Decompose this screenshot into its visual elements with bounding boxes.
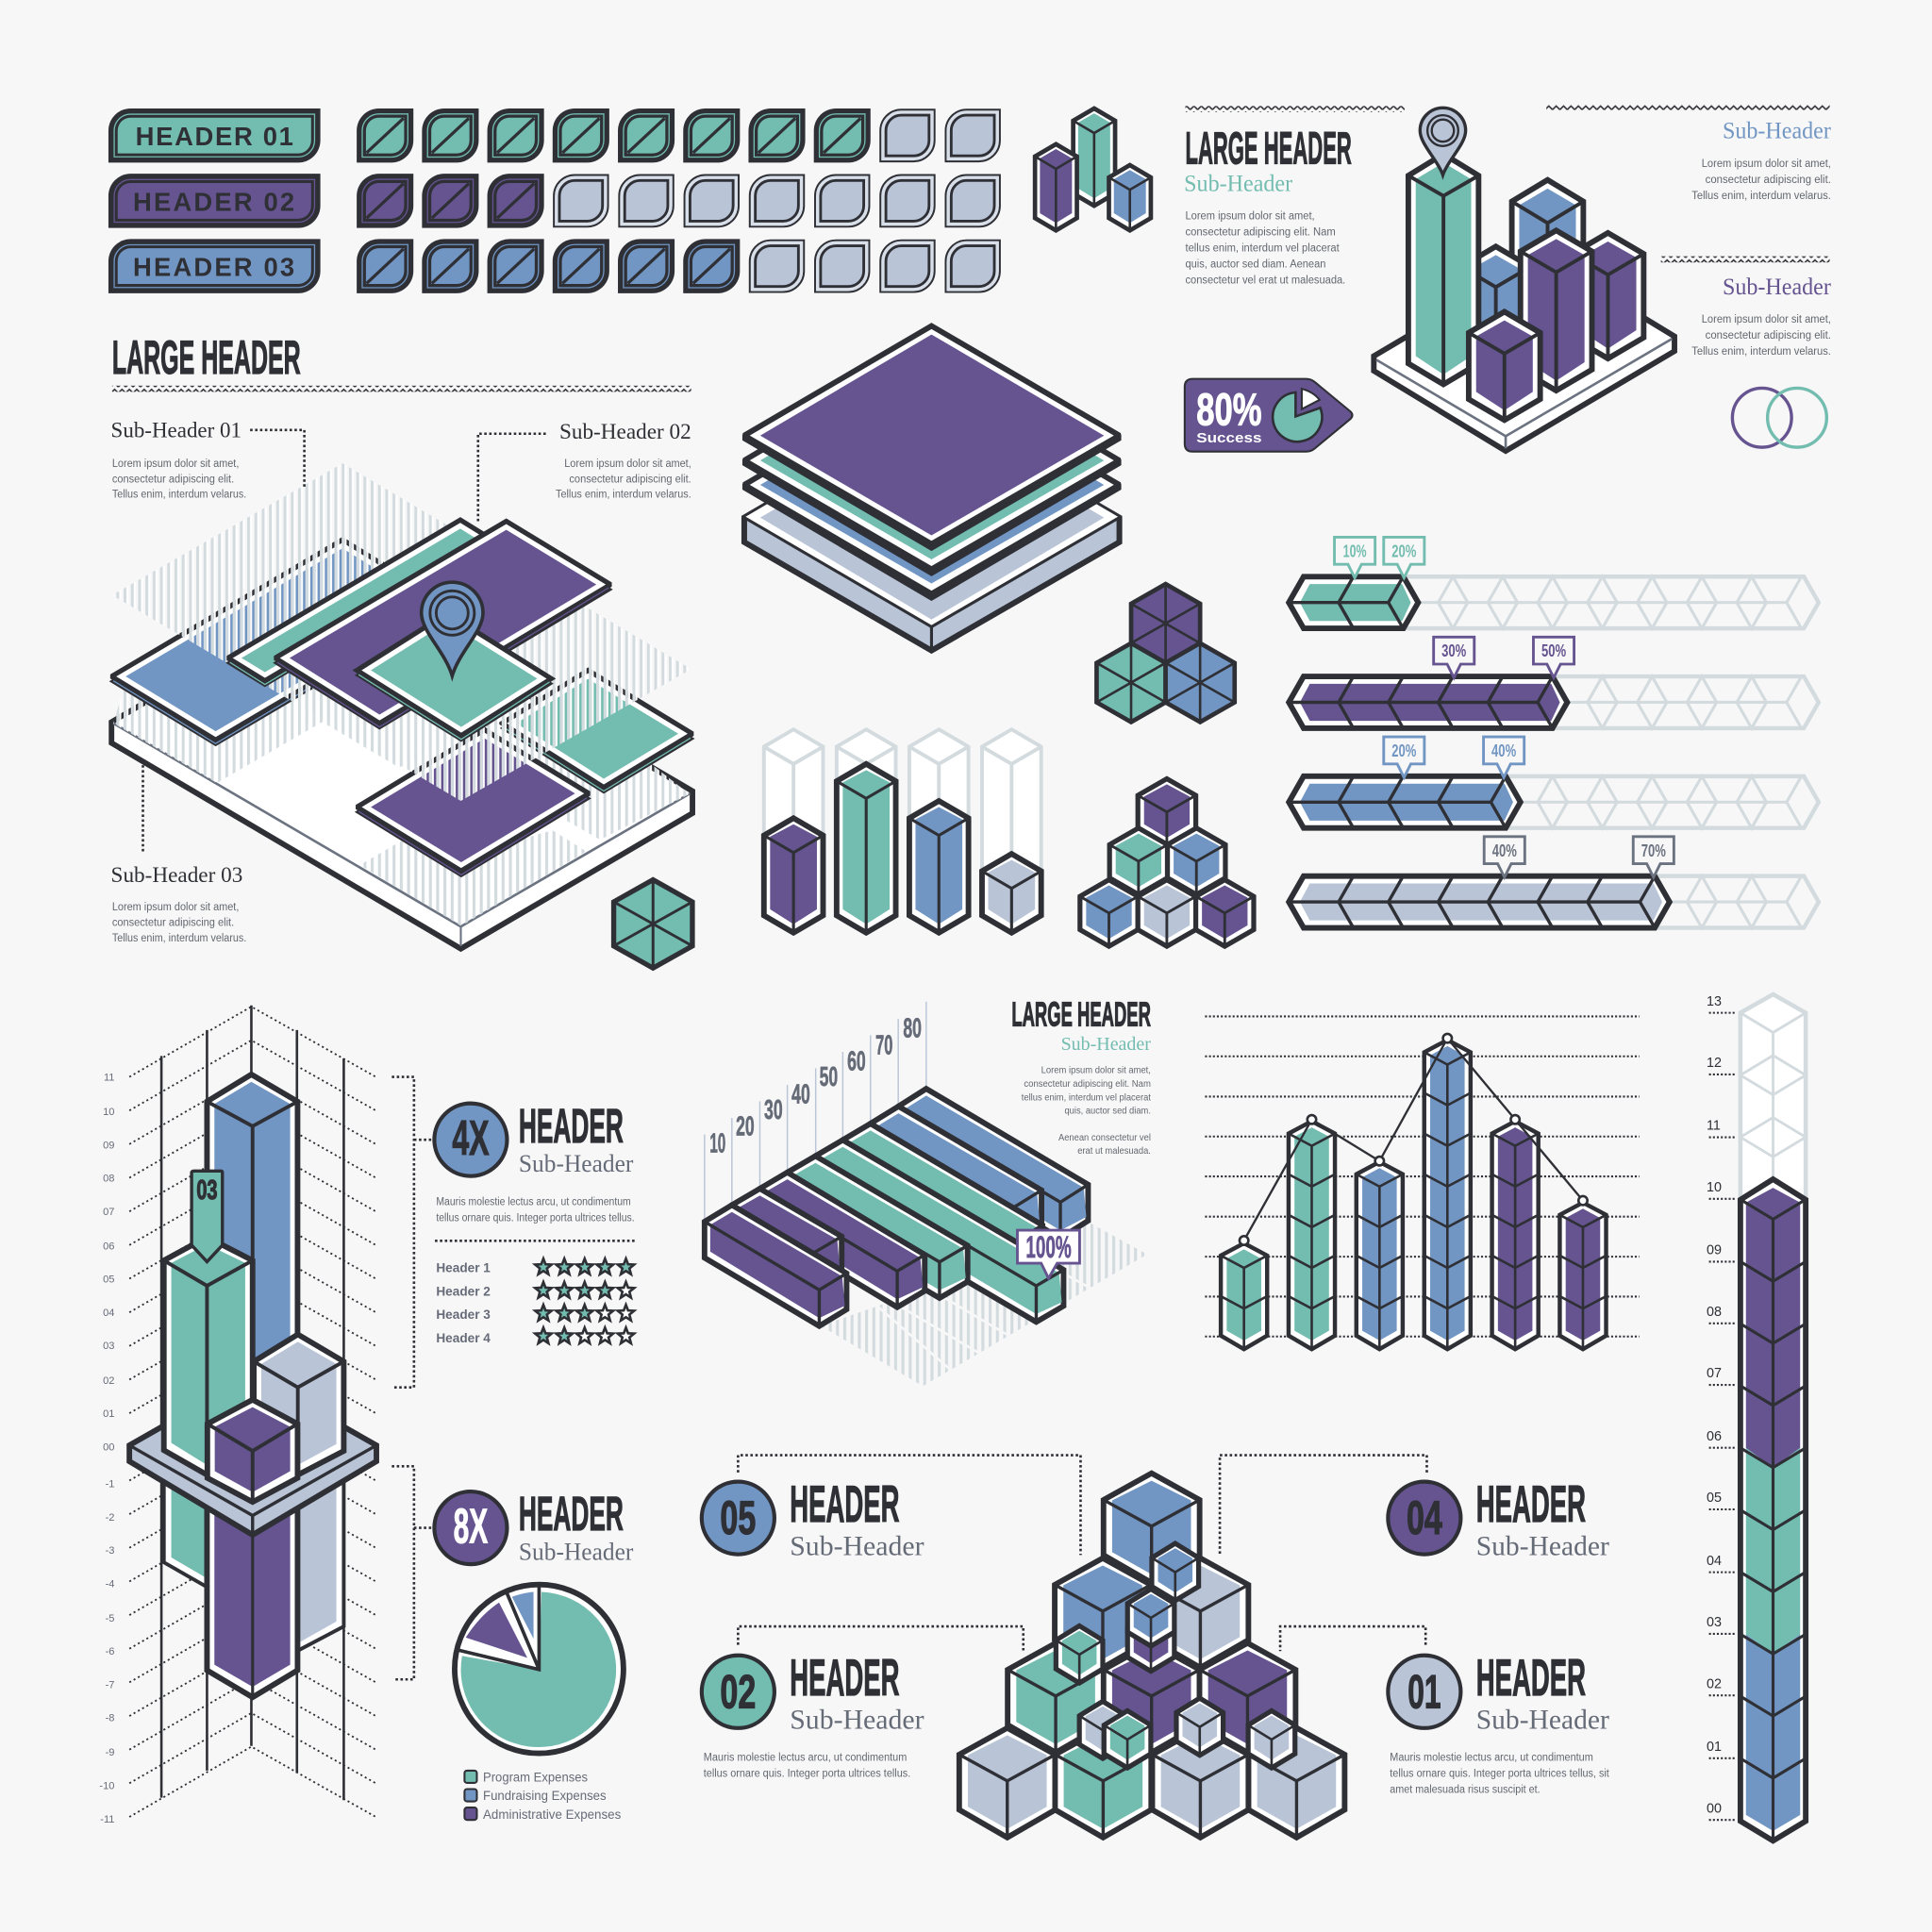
- scale labels: 01: [1707, 1740, 1722, 1755]
- pill: header 02: HEADER 02: [133, 187, 294, 216]
- axis values: 50: [820, 1062, 838, 1092]
- tower scale labels: 05: [103, 1274, 114, 1286]
- base plate: [1374, 257, 1674, 451]
- scale labels: 11: [1707, 1119, 1721, 1134]
- scale labels: 08: [1707, 1305, 1722, 1320]
- progress row 2: [1289, 676, 1819, 728]
- tower scale labels: 07: [103, 1207, 114, 1218]
- column 2: [1289, 1122, 1335, 1349]
- pill: header 01: HEADER 01: [136, 122, 293, 151]
- tower: blue: [207, 1074, 297, 1380]
- label: sub-header 03: Sub-Header 03: [111, 863, 242, 888]
- label: sub-header 01: [111, 419, 305, 501]
- bar 6: [842, 1124, 1042, 1277]
- bar: purple tall: [1521, 230, 1592, 391]
- scale labels: 06: [1707, 1429, 1722, 1444]
- scale labels: [1707, 994, 1722, 1816]
- text block: chart header: LARGE HEADER: [1011, 995, 1151, 1034]
- column: blue: [909, 801, 969, 933]
- dotted gridlines: [1205, 1016, 1640, 1337]
- callout: 02: 02: [720, 1665, 756, 1718]
- tower scale labels: -2: [106, 1512, 114, 1524]
- stacked layers: [744, 325, 1120, 651]
- progress bars: [1289, 537, 1819, 928]
- bar 8: [898, 1089, 1088, 1239]
- tower scale labels: -6: [106, 1646, 114, 1657]
- tower scale labels: -3: [106, 1545, 114, 1557]
- column: light: [982, 854, 1041, 933]
- tower scale labels: 00: [103, 1441, 114, 1453]
- bar: purple front: [1469, 311, 1541, 420]
- callout: 05: [702, 1474, 924, 1561]
- text block: blue sub-header: Sub-Header: [1723, 118, 1832, 143]
- pill: header 01: [108, 108, 321, 162]
- column 1: [1221, 1243, 1267, 1349]
- callout: 04: HEADER: [1476, 1474, 1586, 1533]
- callout: 01: HEADER: [1476, 1648, 1586, 1707]
- column 3: [1357, 1162, 1403, 1349]
- scale labels: 12: [1707, 1056, 1722, 1071]
- axis values: 70: [875, 1030, 892, 1060]
- text block: chart header: Lorem ipsum dolor sit amet,: [1041, 1066, 1151, 1076]
- layer: purple: [744, 325, 1120, 549]
- text block: purple sub-header: consectetur adipiscing elit.: [1706, 329, 1831, 341]
- callout: 05: HEADER: [790, 1474, 899, 1533]
- header pills: [108, 108, 321, 293]
- tower: light: [254, 1335, 343, 1474]
- panel: 8X: HEADER: [519, 1487, 624, 1541]
- callout: 100%: [1017, 1229, 1079, 1278]
- tower scale labels: -1: [106, 1478, 114, 1490]
- label: sub-header 03: [111, 760, 246, 944]
- label: sub-header 01: consectetur adipiscing elit.: [112, 473, 234, 485]
- scale labels: 02: [1707, 1676, 1722, 1691]
- callouts: 10%: [1343, 541, 1366, 560]
- callout: 01: tellus ornare quis. Integer porta ultrices tellus, sit: [1390, 1767, 1609, 1779]
- callout: 01: [1388, 1648, 1609, 1795]
- panel: 8X: Sub-Header: [519, 1539, 634, 1566]
- column: teal: [837, 764, 896, 933]
- star ratings: Header 4: [436, 1331, 491, 1345]
- lower part: teal: [164, 1466, 207, 1587]
- connector dots: [738, 1456, 1426, 1651]
- bar: blue back: [1512, 180, 1583, 378]
- large header with zigzag rule: [112, 331, 691, 391]
- tower grid: [129, 1006, 375, 1817]
- progress row 1: [1289, 576, 1819, 628]
- badge: 4X: 4X: [452, 1111, 490, 1166]
- callout: 02: tellus ornare quis. Integer porta ultrices tellus.: [704, 1767, 910, 1779]
- cube pyramid large: [738, 1456, 1426, 1838]
- tower scale labels: 11: [104, 1072, 114, 1083]
- axis values: 60: [847, 1046, 866, 1076]
- axis lines: [705, 1002, 926, 1222]
- isometric city chart: [1374, 108, 1674, 451]
- scale labels: 03: [1707, 1615, 1722, 1630]
- text block: purple sub-header: [1661, 257, 1832, 358]
- callouts: [1335, 537, 1674, 877]
- axis values: 30: [764, 1095, 783, 1125]
- column 6: [1559, 1203, 1607, 1349]
- tower: teal: [164, 1237, 253, 1474]
- tower scale labels: [99, 1072, 114, 1825]
- bar: teal tall: [1408, 154, 1478, 385]
- tower scale labels: 10: [103, 1107, 114, 1118]
- label: sub-header 01: Lorem ipsum dolor sit amet,: [112, 458, 239, 470]
- callout: 02: Mauris molestie lectus arcu, ut condimentum: [704, 1751, 907, 1763]
- tower scale labels: -10: [99, 1780, 114, 1791]
- plate: [129, 1375, 376, 1535]
- panel: 8X: [434, 1487, 634, 1822]
- bracket: 4X: [391, 1077, 434, 1388]
- text block: large header with sub-header: consectetur vel erat ut malesuada.: [1185, 274, 1345, 286]
- filled column: [1740, 1179, 1806, 1840]
- axis values: 40: [791, 1079, 810, 1109]
- ghost columns: [764, 729, 1041, 912]
- trend line with markers: [1240, 1034, 1588, 1245]
- pill: header 03: [108, 239, 321, 293]
- tower scale labels: -7: [106, 1679, 114, 1690]
- callouts: 70%: [1641, 841, 1666, 860]
- column 4: [1424, 1040, 1471, 1349]
- star ratings: Header 1: [436, 1261, 491, 1275]
- callout: 02: [702, 1648, 924, 1779]
- axis values: 80: [903, 1013, 922, 1043]
- callout: 01: amet malesuada risus suscipit et.: [1390, 1783, 1541, 1795]
- tower scale labels: 08: [103, 1174, 114, 1185]
- panel: purple front: [357, 730, 589, 876]
- scale labels: 07: [1707, 1366, 1722, 1381]
- text block: large header with sub-header: tellus enim, interdum vel placerat: [1185, 242, 1340, 254]
- star ratings: Header 2: [436, 1284, 491, 1298]
- pie legend: Fundraising Expenses: [483, 1789, 607, 1803]
- cube pyramid small: [1080, 778, 1254, 946]
- star ratings: Header 3: [436, 1307, 491, 1322]
- icon: three small prisms: [1035, 108, 1151, 230]
- hex column line chart: [1205, 1016, 1640, 1349]
- pie legend: Administrative Expenses: [483, 1807, 621, 1822]
- callout: 100%: 100%: [1025, 1229, 1072, 1264]
- text block: large header with sub-header: Sub-Header: [1184, 171, 1293, 196]
- isometric horizontal bar chart: [705, 1002, 1147, 1386]
- tall segmented column: [1707, 994, 1806, 1840]
- tower scale labels: 06: [103, 1241, 114, 1252]
- scale dots: [1709, 1013, 1736, 1820]
- bracket: 8X: [391, 1466, 434, 1679]
- label: sub-header 03: consectetur adipiscing elit.: [112, 917, 234, 929]
- callout: 02: Sub-Header: [790, 1704, 924, 1735]
- text block: blue sub-header: Lorem ipsum dolor sit amet,: [1702, 158, 1831, 170]
- lower part: light: [297, 1466, 343, 1651]
- panel: long teal: [228, 520, 497, 686]
- icon: blue location pin: [422, 582, 483, 675]
- label: sub-header 03: Tellus enim, interdum velarus.: [112, 932, 246, 944]
- icon: teal hexagon: [614, 880, 692, 968]
- callouts: 40%: [1491, 741, 1516, 760]
- bar 3: [759, 1173, 924, 1307]
- tower scale labels: 03: [103, 1341, 114, 1352]
- label: sub-header 02: Sub-Header 02: [559, 420, 691, 444]
- text block: large header with sub-header: [1184, 106, 1405, 286]
- panel: small teal: [357, 613, 551, 741]
- label: sub-header 01: Sub-Header 01: [111, 419, 242, 443]
- text block: chart header: Aenean consectetur vel: [1058, 1133, 1151, 1143]
- layer: teal: [744, 350, 1120, 575]
- tower scale labels: 04: [103, 1307, 114, 1319]
- bar: blue short: [1461, 246, 1530, 378]
- text block: chart header: Sub-Header: [1061, 1034, 1151, 1055]
- tower scale labels: -5: [106, 1613, 114, 1624]
- text block: purple sub-header: Tellus enim, interdum velarus.: [1691, 345, 1831, 358]
- tag: 80% success: 80%: [1196, 385, 1261, 436]
- text block: chart header: erat ut malesuada.: [1077, 1146, 1151, 1157]
- panel: teal right: [502, 671, 692, 792]
- column 5: [1492, 1122, 1539, 1349]
- pill: header 02: [108, 174, 321, 228]
- text block: large header with sub-header: quis, auctor sed diam. Aenean: [1185, 258, 1325, 270]
- panel: long purple: [275, 521, 610, 728]
- scale labels: 10: [1707, 1180, 1722, 1195]
- axis values: 20: [736, 1111, 755, 1141]
- callout: 05: Sub-Header: [790, 1530, 924, 1561]
- scale labels: 00: [1707, 1801, 1722, 1816]
- scale labels: 04: [1707, 1554, 1722, 1569]
- callout: 01: Sub-Header: [1476, 1704, 1609, 1735]
- scale labels: 05: [1707, 1491, 1722, 1506]
- badge: 8X: 8X: [454, 1499, 488, 1554]
- base plate: [111, 587, 692, 949]
- callout: 04: [1388, 1474, 1609, 1561]
- progress row 3: [1289, 776, 1819, 828]
- callout: 05: 05: [720, 1491, 756, 1544]
- pie legend: Program Expenses: [483, 1771, 588, 1785]
- bar 7: [871, 1107, 1041, 1243]
- label: sub-header 02: [478, 420, 691, 524]
- tower scale labels: 02: [103, 1375, 114, 1387]
- text block: purple sub-header: Sub-Header: [1723, 275, 1832, 300]
- text block: large header with sub-header: Lorem ipsum dolor sit amet,: [1185, 209, 1315, 222]
- callouts: 30%: [1441, 641, 1466, 660]
- axis values: [709, 1013, 922, 1159]
- floor stripes: [821, 1220, 1147, 1386]
- text block: blue sub-header: Tellus enim, interdum velarus.: [1691, 190, 1831, 202]
- scale labels: 09: [1707, 1243, 1722, 1258]
- text block: blue sub-header: consectetur adipiscing elit.: [1706, 174, 1831, 186]
- upper stripes: [112, 463, 691, 801]
- bar 1: [705, 1205, 846, 1326]
- label: sub-header 03: Lorem ipsum dolor sit amet,: [112, 901, 239, 913]
- tower scale labels: -4: [106, 1578, 114, 1590]
- panel: 4X: [434, 1099, 636, 1345]
- layer: blue: [744, 375, 1120, 599]
- column: purple: [764, 818, 823, 933]
- tower scale labels: 01: [103, 1408, 114, 1420]
- lower stripes: [113, 653, 690, 926]
- lower part: purple: [207, 1478, 297, 1697]
- text block: chart header: consectetur adipiscing elit. Nam: [1024, 1079, 1151, 1090]
- star ratings: [436, 1258, 634, 1345]
- icon: three hexagons: [1096, 584, 1235, 722]
- bar 2: [732, 1189, 841, 1289]
- callouts: 20%: [1391, 541, 1416, 560]
- badge: 4X: [434, 1104, 507, 1176]
- text block: chart header: quis, auctor sed diam.: [1064, 1107, 1151, 1117]
- text block: purple sub-header: Lorem ipsum dolor sit amet,: [1702, 313, 1831, 325]
- badge: 8X: [434, 1491, 507, 1564]
- callouts: 20%: [1391, 741, 1416, 760]
- label: sub-header 01: Tellus enim, interdum velarus.: [112, 489, 246, 501]
- label: sub-header 02: Lorem ipsum dolor sit amet,: [564, 458, 691, 470]
- ghost column: [1740, 994, 1806, 1214]
- bar 4: [788, 1156, 968, 1298]
- tag: 80% success: Success: [1196, 430, 1261, 446]
- layer: base plate: [744, 408, 1120, 651]
- icon: location pin: [1420, 108, 1466, 175]
- panel: 4X: Mauris molestie lectus arcu, ut condimentum: [436, 1195, 631, 1208]
- pie legend: [464, 1771, 621, 1822]
- isometric layers diagram: [111, 463, 692, 949]
- tag: 03: 03: [196, 1175, 218, 1206]
- tower: purple: [208, 1400, 297, 1502]
- large header with zigzag rule: LARGE HEADER: [112, 331, 301, 384]
- label: sub-header 02: Tellus enim, interdum velarus.: [556, 489, 691, 501]
- text block: blue sub-header: [1546, 105, 1832, 202]
- bar: purple right: [1573, 233, 1643, 358]
- tag: 80% success: [1185, 379, 1352, 452]
- callouts: 50%: [1541, 641, 1566, 660]
- scale labels: 13: [1707, 994, 1722, 1009]
- callout: 04: Sub-Header: [1476, 1530, 1609, 1561]
- panel: 4X: tellus ornare quis. Integer porta ultrices tellus.: [436, 1211, 635, 1224]
- panel: 4X: Sub-Header: [519, 1150, 634, 1177]
- text block: large header with sub-header: LARGE HEADER: [1185, 124, 1352, 175]
- callouts: 40%: [1492, 841, 1517, 860]
- tag: 03: [192, 1171, 223, 1261]
- tower scale labels: -9: [106, 1747, 114, 1758]
- tower scale labels: 09: [103, 1140, 114, 1151]
- panel: 4X: HEADER: [519, 1099, 624, 1153]
- callout: 04: 04: [1407, 1491, 1442, 1544]
- bar 5: [815, 1140, 1063, 1322]
- callout: 02: HEADER: [790, 1648, 899, 1707]
- callout: 01: Mauris molestie lectus arcu, ut condimentum: [1390, 1751, 1593, 1763]
- callout: 01: 01: [1407, 1665, 1441, 1718]
- text block: large header with sub-header: consectetur adipiscing elit. Nam: [1185, 225, 1336, 238]
- text block: chart header: tellus enim, interdum vel placerat: [1022, 1092, 1151, 1103]
- tower scale labels: -8: [106, 1713, 114, 1724]
- icon: venn circles: [1732, 388, 1826, 447]
- isometric tower chart: [129, 1006, 376, 1817]
- text block: chart header: [1011, 995, 1151, 1157]
- leaf icon grid: [357, 108, 1000, 293]
- progress row 4: [1289, 876, 1819, 928]
- pill: header 03: HEADER 03: [133, 253, 294, 282]
- column chart with ghost columns: [764, 729, 1041, 933]
- axis values: 10: [709, 1129, 725, 1159]
- label: sub-header 02: consectetur adipiscing elit.: [569, 473, 691, 485]
- tower scale labels: -11: [100, 1814, 114, 1825]
- pie chart: [455, 1585, 624, 1754]
- panel: blue: [111, 540, 446, 745]
